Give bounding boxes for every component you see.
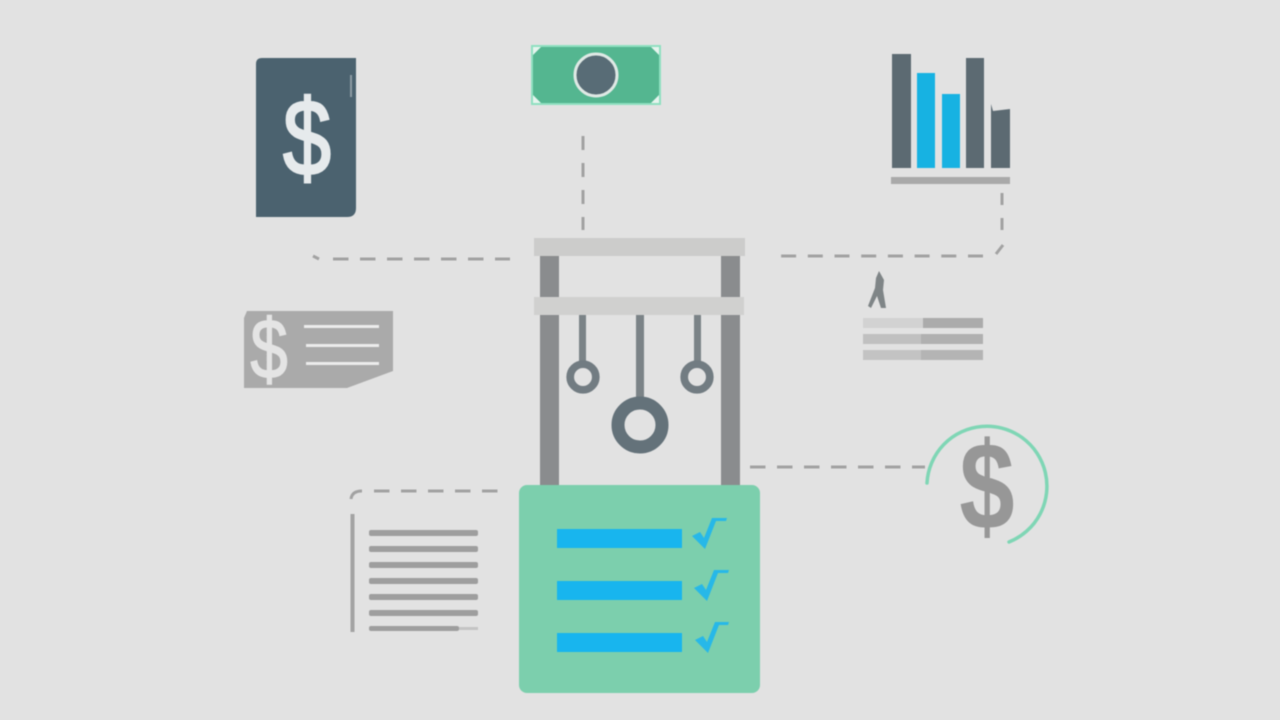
bar chart (891, 54, 1010, 184)
icon: grey dollar receipt (244, 303, 393, 397)
checklist row 2 (557, 570, 729, 601)
connector: document dashed line to checklist (351, 491, 498, 499)
central press machine (534, 238, 745, 486)
press: left hanging ring (570, 315, 596, 390)
checklist row 3 (557, 622, 729, 653)
icon: grey dollar receipt: $ (250, 303, 288, 397)
icon: dollar coin with green arc: $ (959, 416, 1015, 556)
press: right hanging ring (684, 315, 710, 390)
icon: dark dollar card (256, 58, 356, 217)
connector: coin dashed line to press (750, 466, 925, 468)
press: second beam (534, 297, 744, 315)
checklist row 1 (557, 518, 727, 549)
icon: green banknote (532, 46, 660, 104)
icon: dark dollar card: $ (283, 77, 331, 198)
icon: dollar coin with green arc (927, 416, 1047, 556)
press: centre hanging ring (618, 315, 662, 447)
connector: banknote dashed line to press (582, 136, 584, 230)
connector: bar chart dashed line to press (778, 193, 1003, 256)
connector: left dashed line to press (313, 256, 510, 259)
press: top beam (534, 238, 745, 256)
icon: walking figure (868, 271, 886, 308)
press: right column (721, 256, 740, 486)
icon: document with text lines (350, 514, 478, 632)
icon: striped list bars (863, 318, 983, 360)
panel: green checklist (519, 485, 760, 693)
press: left column (540, 256, 559, 486)
